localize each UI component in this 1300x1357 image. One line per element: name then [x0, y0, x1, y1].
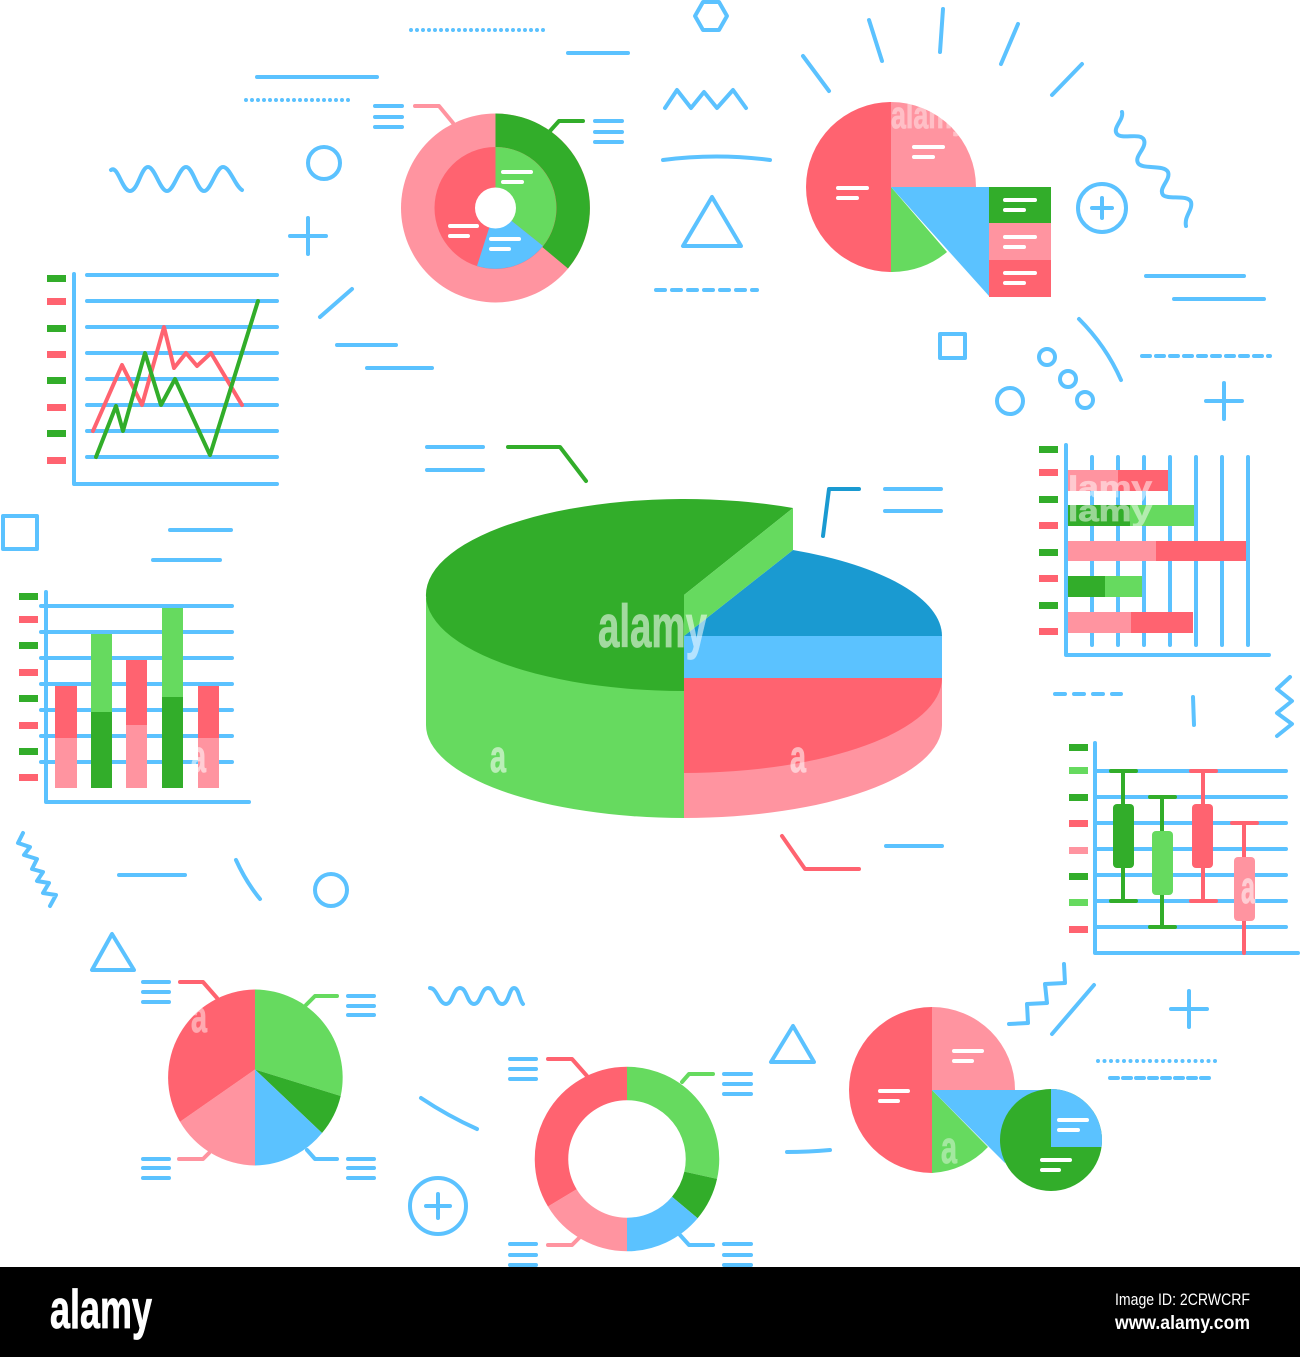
watermark: a	[490, 731, 507, 782]
watermark: a	[790, 731, 807, 782]
slice: light blue band	[684, 636, 942, 678]
footer bar	[0, 1267, 1300, 1357]
footer logo: alamy	[50, 1278, 152, 1340]
labels for central pie	[427, 447, 942, 869]
slice: light green side	[426, 598, 684, 818]
chart: bottom right pie with circle	[849, 1007, 1102, 1191]
footer url: www.alamy.com	[1114, 1313, 1250, 1334]
chart: bottom left pie: a	[191, 991, 208, 1042]
chart: candlestick: a	[1241, 862, 1256, 913]
chart: stacked column chart: a	[191, 731, 207, 782]
chart: line chart	[47, 274, 277, 484]
chart: top right pie with stacked bar	[806, 95, 1051, 297]
watermark	[490, 593, 807, 782]
chart: central 3D pie	[426, 499, 942, 818]
decorative icons: top right	[803, 9, 1292, 736]
chart: bottom donut	[510, 1059, 751, 1265]
decorative icons: top	[111, 2, 770, 368]
chart: candlestick	[1069, 743, 1298, 953]
decorative icons: left	[3, 516, 347, 970]
slice: dark blue top	[684, 550, 942, 636]
slice: dark green top	[426, 499, 793, 691]
slice: cut face	[684, 508, 793, 636]
chart: bottom right pie with circle: a	[941, 1122, 958, 1173]
chart: bottom left pie	[143, 982, 374, 1178]
chart: horizontal bars: lamy	[1068, 471, 1152, 504]
chart: horizontal bars	[1039, 445, 1269, 655]
chart: stacked column chart	[19, 592, 249, 802]
slice: red top	[684, 678, 942, 773]
watermark: alamy	[598, 593, 707, 660]
chart: horizontal bars: lamy	[1068, 495, 1152, 528]
chart: top right pie with stacked bar: alamy	[891, 95, 967, 137]
chart: top double donut	[375, 106, 622, 302]
slice: pink side	[684, 678, 942, 818]
decorative icons: bottom	[410, 964, 1220, 1234]
footer image id: Image ID: 2CRWCRF	[1115, 1290, 1250, 1309]
